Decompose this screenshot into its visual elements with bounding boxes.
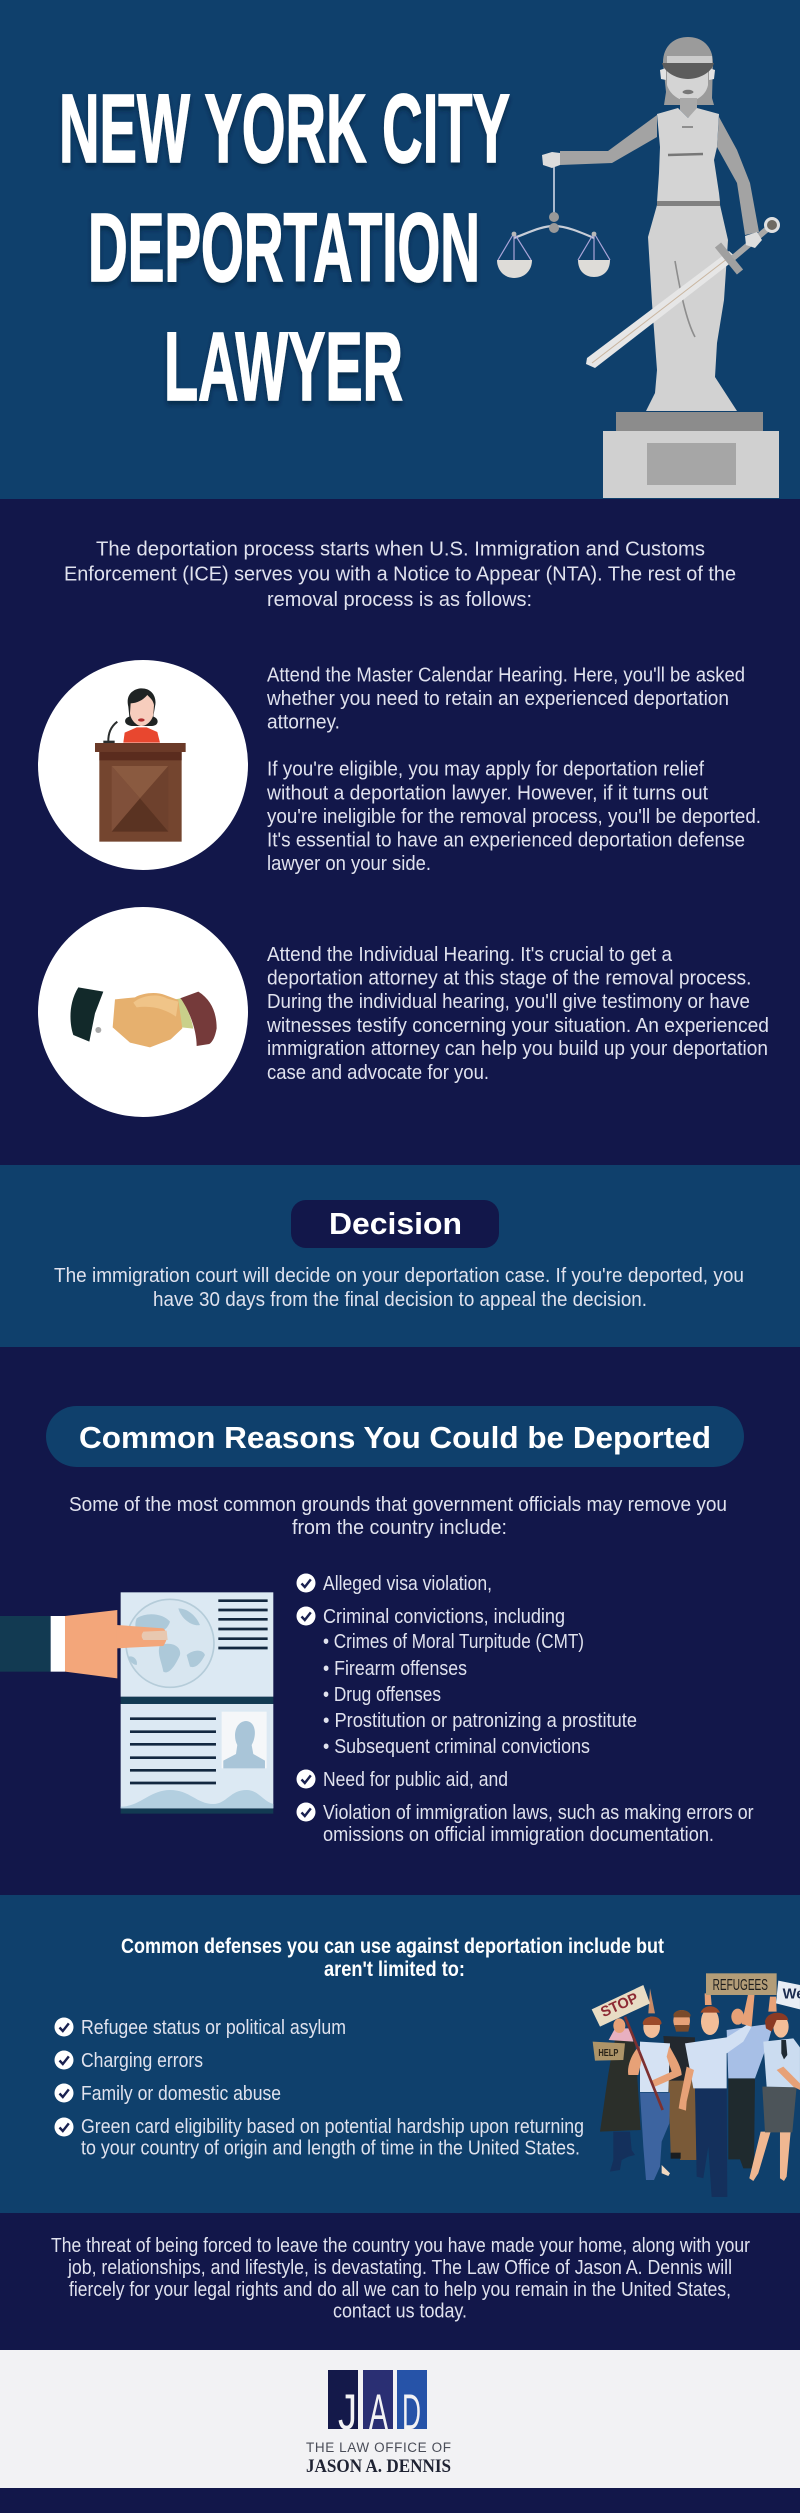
- icon: speaker at podium in white circle: [38, 660, 248, 870]
- sign: help: [593, 2042, 625, 2061]
- title: LAWYER: [164, 312, 403, 421]
- heading: common defenses: [121, 1935, 664, 1981]
- panel: logo footer background: [0, 2350, 800, 2488]
- statue figure: [542, 37, 759, 411]
- logo blocks: [328, 2370, 427, 2429]
- logo letters: J: [338, 2384, 357, 2440]
- sub-list: conviction types: [323, 1630, 637, 1758]
- logo: JAD law office: [306, 2370, 451, 2477]
- intro text: removal process is as follows:: [267, 588, 532, 611]
- hand: [0, 1610, 168, 1678]
- item: criminal convictions: Criminal convictions, including: [323, 1605, 565, 1628]
- panel: hero background: [0, 0, 800, 499]
- passport: [121, 1592, 273, 1814]
- text: common grounds intro: from the country include:: [292, 1516, 507, 1539]
- icon: lady justice statue: [497, 37, 779, 498]
- right cuff: [175, 998, 193, 1029]
- panel: defenses background: [0, 1895, 800, 2213]
- text: individual hearing: Attend the Individual Hearing. It's crucial to get a: [267, 943, 673, 966]
- panel: closing background: [0, 2213, 800, 2350]
- text: closing paragraph: contact us today.: [333, 2300, 467, 2322]
- sign: refugees: REFUGEES: [713, 1977, 768, 1994]
- heading: common defenses: Common defenses you can use against deportation include but: [121, 1935, 664, 1958]
- text: master calendar hearing: you're ineligible for the removal process, you'll be deported.: [267, 805, 761, 828]
- heading: decision: [291, 1200, 499, 1248]
- left sleeve: [70, 987, 103, 1042]
- heading: common defenses: aren't limited to:: [324, 1958, 465, 1981]
- item: immigration law violations: [296, 1801, 754, 1846]
- protester at rear right: [727, 2009, 773, 2168]
- text: individual hearing: case and advocate for you.: [267, 1061, 489, 1084]
- item: green card eligibility: to your country of origin and length of time in the United States.: [81, 2136, 580, 2160]
- intro text: Enforcement (ICE) serves you with a Notice to Appear (NTA). The rest of the: [64, 562, 736, 586]
- heading: common reasons: Common Reasons You Could be Deported: [79, 1420, 711, 1455]
- man in t-shirt: [679, 1988, 777, 2197]
- text: closing paragraph: [51, 2234, 750, 2322]
- text: master calendar hearing: If you're eligible, you may apply for deportation relief: [267, 758, 704, 781]
- sign: help: HELP: [598, 2048, 618, 2059]
- item: immigration law violations: omissions on official immigration documentation.: [323, 1823, 714, 1846]
- title: [59, 74, 510, 421]
- text: individual hearing: deportation attorney at this stage of the removal process.: [267, 967, 752, 990]
- clasped hands: [113, 993, 182, 1047]
- sub-list: conviction types: • Prostitution or patronizing a prostitute: [323, 1709, 637, 1732]
- text: common grounds intro: [69, 1493, 727, 1539]
- lectern: [95, 743, 186, 842]
- intro text: [64, 538, 736, 611]
- logo letters: [338, 2384, 421, 2440]
- text: common grounds intro: Some of the most common grounds that government officials may remove you: [69, 1493, 727, 1516]
- item: family abuse: Family or domestic abuse: [81, 2082, 281, 2105]
- text: master calendar hearing: without a deportation lawyer. However, if it turns out: [266, 781, 708, 804]
- list: common grounds: [296, 1572, 754, 1846]
- sub-list: conviction types: • Crimes of Moral Turpitude (CMT): [323, 1630, 584, 1653]
- panel: decision background: [0, 1165, 800, 1347]
- text: master calendar hearing: lawyer on your side.: [267, 852, 431, 875]
- icon: protesters with signs: [592, 1973, 800, 2197]
- item: charging errors: Charging errors: [81, 2049, 203, 2072]
- logo name: JASON A. DENNIS: [306, 2456, 451, 2477]
- text: master calendar hearing: It's essential to have an experienced deportation defense: [267, 828, 745, 851]
- text: master calendar hearing: attorney.: [267, 711, 340, 734]
- logo letters: D: [402, 2384, 421, 2440]
- icon: passport and hand: [0, 1592, 273, 1814]
- text: decision: [54, 1264, 744, 1311]
- heading: decision: Decision: [329, 1206, 462, 1241]
- sub-list: conviction types: • Drug offenses: [323, 1683, 441, 1706]
- text: individual hearing: [266, 943, 769, 1084]
- text: individual hearing: During the individual hearing, you'll give testimony or have: [267, 990, 750, 1013]
- sub-list: conviction types: • Firearm offenses: [323, 1657, 467, 1680]
- statue base: [603, 412, 779, 498]
- speaker: [123, 688, 160, 743]
- cufflink: [95, 1027, 101, 1033]
- icon: handshake in white circle: [38, 907, 248, 1117]
- panel: process background: [0, 499, 800, 1165]
- sub-list: conviction types: • Subsequent criminal convictions: [323, 1735, 590, 1758]
- intro text: The deportation process starts when U.S. Immigration and Customs: [96, 538, 705, 560]
- sign: stop: STOP: [598, 1990, 641, 2021]
- panel: bottom strip: [0, 2488, 800, 2513]
- item: public aid: Need for public aid, and: [323, 1768, 508, 1791]
- logo letters: A: [369, 2384, 388, 2440]
- woman with stick: [628, 2016, 682, 2180]
- item: green card eligibility: Green card eligibility based on potential hardship upon returning: [81, 2115, 584, 2138]
- microphone base: [103, 741, 115, 743]
- heading: common reasons: [46, 1406, 744, 1467]
- businesswoman: [749, 2013, 800, 2181]
- balance scales: [497, 167, 610, 278]
- sign: we: [776, 1981, 800, 2009]
- text: decision: have 30 days from the final decision to appeal the decision.: [153, 1288, 647, 1311]
- panel: common reasons background: [0, 1347, 800, 1895]
- item: visa violation: Alleged visa violation,: [323, 1572, 492, 1595]
- protester with beard: [663, 2010, 697, 2160]
- text: master calendar hearing: Attend the Master Calendar Hearing. Here, you'll be asked: [267, 663, 745, 686]
- right sleeve: [180, 992, 217, 1046]
- item: green card eligibility: [54, 2115, 584, 2160]
- item: refugee status: Refugee status or political asylum: [81, 2016, 346, 2039]
- title: DEPORTATION: [88, 193, 480, 302]
- protester in dark coat: [600, 2018, 641, 2172]
- sign: stop: [592, 1985, 655, 2052]
- logo tagline: THE LAW OFFICE OF: [306, 2440, 451, 2455]
- sign: refugees: [706, 1973, 777, 1995]
- text: master calendar hearing: whether you need to retain an experienced deportation: [266, 687, 729, 710]
- microphone: [108, 722, 117, 742]
- text: individual hearing: witnesses testify concerning your situation. An experienced: [266, 1014, 769, 1037]
- sword: [586, 218, 778, 368]
- text: decision: The immigration court will decide on your deportation case. If you're deported, you: [54, 1264, 744, 1287]
- text: individual hearing: immigration attorney can help you build up your deportation: [267, 1037, 768, 1060]
- text: master calendar hearing: [266, 663, 761, 875]
- list: defenses: [54, 2016, 584, 2160]
